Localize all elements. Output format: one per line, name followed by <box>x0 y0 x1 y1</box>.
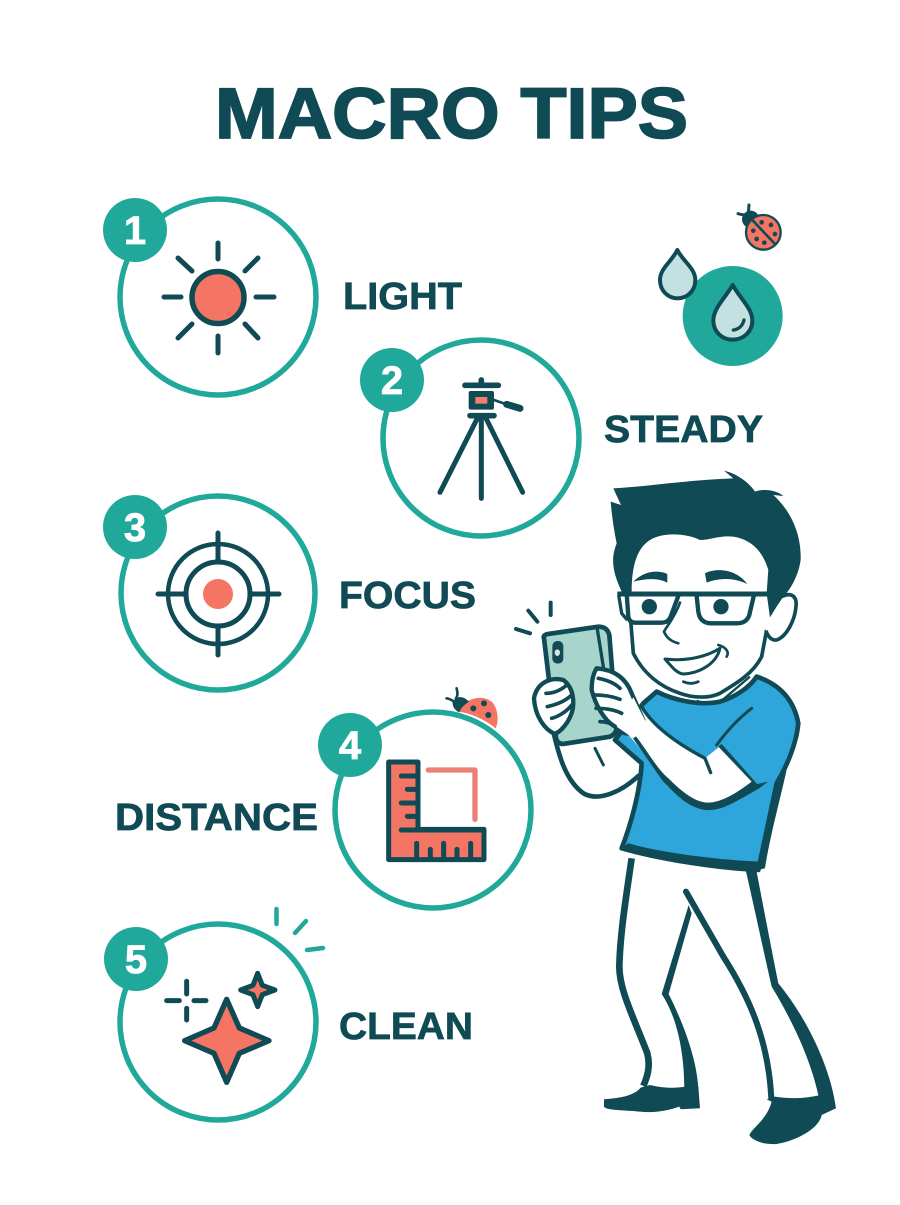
glasses <box>617 593 770 623</box>
title: MACRO TIPS <box>215 75 688 154</box>
badge 5: 5 <box>125 938 147 982</box>
trousers and shoes <box>604 857 836 1144</box>
badge 2 <box>360 348 424 412</box>
label: distance: DISTANCE <box>115 797 318 839</box>
ladybug <box>738 205 781 250</box>
panel: tip 3 focus <box>103 495 476 690</box>
icon: water drops and ladybug <box>660 205 783 366</box>
label: clean: CLEAN <box>339 1006 473 1048</box>
badge 2: 2 <box>381 359 403 403</box>
head <box>611 471 801 703</box>
face and ear <box>630 527 796 703</box>
small drop <box>660 250 695 298</box>
phone <box>544 627 617 744</box>
label: light: LIGHT <box>343 276 462 318</box>
panel: tip 1 light <box>103 198 462 395</box>
eyes <box>642 599 729 614</box>
t-shirt <box>615 677 798 871</box>
icon: sparkles <box>167 973 275 1082</box>
icon: target <box>158 533 279 655</box>
panel: tip 2 steady <box>360 340 763 536</box>
badge 1 <box>103 198 167 262</box>
teal circle with drop <box>683 266 783 366</box>
eyebrows <box>633 570 747 584</box>
panel: tip 4 distance <box>115 688 531 908</box>
hands <box>534 668 648 738</box>
icon: sun <box>164 243 274 353</box>
label: focus: FOCUS <box>339 575 476 617</box>
badge 1: 1 <box>124 209 146 253</box>
nose and mouth <box>664 603 728 683</box>
icon: tripod <box>440 380 523 498</box>
arms <box>553 707 768 810</box>
icon: ruler square <box>389 762 484 860</box>
icon: shine ticks <box>276 909 323 950</box>
badge 4: 4 <box>339 724 362 768</box>
badge 5 <box>104 927 168 991</box>
badge 3 <box>103 495 167 559</box>
label: steady: STEADY <box>604 409 763 451</box>
badge 4 <box>318 713 382 777</box>
icon: ladybug on ring <box>447 688 498 728</box>
illustration: man photographing with phone <box>516 471 836 1144</box>
hair <box>611 471 801 617</box>
panel: tip 5 clean <box>104 909 473 1120</box>
camera flash ticks <box>516 603 551 633</box>
badge 3: 3 <box>124 506 146 550</box>
